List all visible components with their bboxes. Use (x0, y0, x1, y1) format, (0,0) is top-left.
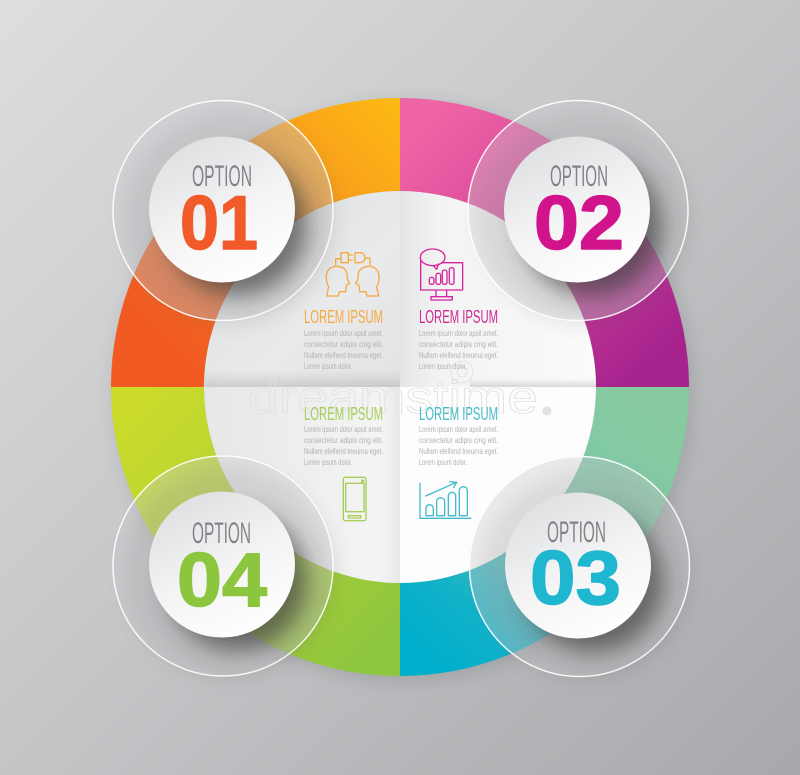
body text: consectetur adipis cing elit. (419, 435, 498, 445)
body text: consectetur adipis cing elit. (419, 339, 498, 349)
inner panel: top left (204, 191, 400, 387)
badge: option 02 (468, 100, 691, 325)
fold shadow (204, 370, 400, 387)
body text: Lorem ipsum dolor. (419, 361, 467, 371)
inner panel: top right (400, 191, 596, 387)
body text (419, 424, 498, 467)
badge: option 03 (470, 456, 693, 681)
label: OPTION (192, 160, 252, 193)
body text: Lorem ipsum dolor apsit amet, (419, 424, 498, 434)
disc shadow (522, 156, 662, 296)
ring segment: teal (400, 387, 689, 676)
ring segment: green (111, 387, 400, 676)
body text (304, 424, 383, 467)
label: OPTION (192, 517, 251, 550)
glass shadow (124, 468, 336, 680)
icon: smartphone (343, 477, 366, 521)
panel: text block 04 (304, 403, 383, 521)
ring shadow (115, 103, 693, 681)
disc shadow (523, 512, 663, 652)
body text: consectetur adipis cing elit. (304, 339, 383, 349)
glass ring (468, 100, 688, 320)
glass shadow (481, 469, 693, 681)
inner panel: bottom left (204, 387, 400, 583)
body text (304, 328, 383, 371)
body text: Lorem ipsum dolor apsit amet, (304, 328, 383, 338)
disc (504, 136, 650, 282)
body text (419, 328, 498, 371)
body text: Nullam eleifend tneurna eget. (419, 350, 498, 360)
panel: text block 01 (304, 253, 383, 371)
heading: LOREM IPSUM (419, 306, 498, 327)
panel: text block 03 (419, 403, 498, 518)
watermark (248, 361, 552, 423)
watermark: dreamstime (248, 371, 538, 423)
disc (149, 136, 295, 282)
disc shadow (167, 156, 307, 296)
ring segment: orange (111, 98, 400, 387)
glass shadow (124, 113, 336, 325)
body text: Nullam eleifend tneurna eget. (304, 350, 383, 360)
icon: monitor with speech bubble (420, 249, 463, 300)
number: 02 (534, 181, 624, 266)
body text: Nullam eleifend tneurna eget. (304, 446, 383, 456)
badge: option 01 (113, 100, 336, 325)
fold shadow right (470, 378, 596, 387)
body text: Lorem ipsum dolor. (304, 457, 352, 467)
icon: rising bar chart (420, 482, 471, 518)
disc (505, 492, 651, 638)
ring segment: magenta (400, 98, 689, 387)
body text: Lorem ipsum dolor apsit amet, (419, 328, 498, 338)
body text: Lorem ipsum dolor. (304, 361, 352, 371)
glass ring (113, 100, 333, 320)
number: 01 (180, 181, 258, 266)
disc (149, 492, 295, 638)
body text: consectetur adipis cing elit. (304, 435, 383, 445)
icon: two heads with plug (326, 253, 379, 296)
glass ring (470, 456, 690, 676)
number: 03 (530, 536, 621, 621)
body text: Lorem ipsum dolor apsit amet, (304, 424, 383, 434)
body text: Lorem ipsum dolor. (419, 457, 467, 467)
label: OPTION (547, 516, 606, 549)
glass ring (113, 456, 333, 676)
label: OPTION (550, 160, 608, 193)
heading: LOREM IPSUM (304, 306, 383, 327)
number: 04 (177, 538, 267, 623)
glass shadow (479, 113, 691, 325)
heading: LOREM IPSUM (419, 403, 498, 424)
body text: Nullam eleifend tneurna eget. (419, 446, 498, 456)
disc shadow (167, 511, 307, 651)
panel: text block 02 (419, 249, 498, 371)
inner panel: bottom right (400, 387, 596, 583)
badge: option 04 (113, 456, 336, 680)
heading: LOREM IPSUM (304, 403, 383, 424)
